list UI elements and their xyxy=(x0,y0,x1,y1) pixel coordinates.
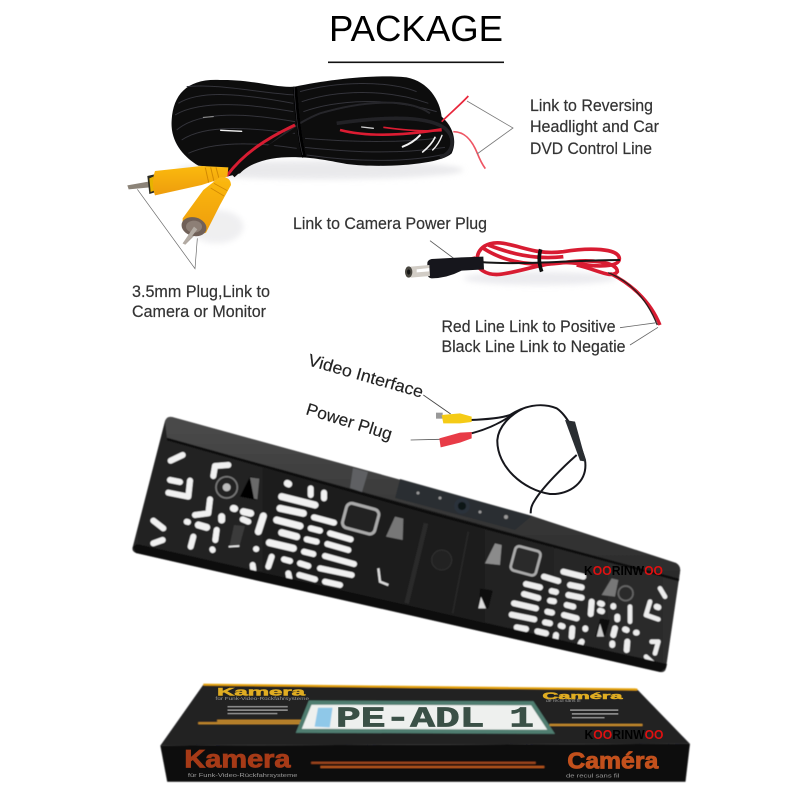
product box: für Funk-Video-Rückfahrsysteme xyxy=(188,773,297,779)
wire highlights xyxy=(203,117,442,152)
photo: camera connector wires xyxy=(411,395,586,513)
product box: für Funk-Video-Rückfahrsysteme xyxy=(215,696,310,702)
box top face xyxy=(160,685,690,746)
callout: red and black lines: Black Line Link to Negatie xyxy=(442,337,626,356)
red wires xyxy=(227,125,295,176)
product box xyxy=(160,685,690,782)
cable bundle xyxy=(172,76,454,177)
callout: reversing headlight: Link to Reversing xyxy=(530,96,653,115)
box front face xyxy=(160,744,690,782)
watermark: frame: KOORINWOO xyxy=(584,564,663,578)
box labels: Caméra xyxy=(567,748,659,774)
callout: 3.5mm plug: Camera or Monitor xyxy=(132,302,266,321)
plate number: PE-ADL 1 xyxy=(336,704,534,736)
left mounting slots xyxy=(153,455,354,585)
photo: AV extension cable coil xyxy=(127,76,485,269)
product box: de recul sans fil xyxy=(566,773,619,779)
photo: power cable xyxy=(405,241,660,345)
right mounting slots xyxy=(512,572,665,663)
callout: 3.5mm plug xyxy=(132,282,270,321)
box labels: Caméra xyxy=(543,691,624,702)
icon: yellow RCA connector xyxy=(436,413,443,419)
band xyxy=(295,87,304,157)
watermark: box: KOORINWOO xyxy=(584,728,664,742)
callout: red and black lines xyxy=(442,317,626,356)
box labels xyxy=(184,687,659,774)
camera housing xyxy=(395,479,532,530)
leader lines xyxy=(137,189,197,269)
icon: DC barrel plug xyxy=(427,257,484,278)
box labels: Kamera xyxy=(217,687,307,699)
left reflective details xyxy=(216,477,403,585)
callout: 3.5mm plug: 3.5mm Plug,Link to xyxy=(132,282,270,301)
frame top band xyxy=(165,417,680,579)
callout: camera power plug: Link to Camera Power Plug xyxy=(293,214,487,233)
photo: licence plate camera frame xyxy=(132,417,680,672)
callout: red and black lines: Red Line Link to Positive xyxy=(442,317,616,336)
callout: reversing headlight xyxy=(467,96,659,158)
label: video interface: Video Interface xyxy=(306,351,426,402)
icon: red RCA connector xyxy=(439,432,472,447)
frame body xyxy=(132,417,680,672)
title: PACKAGE xyxy=(329,8,503,49)
licence plate xyxy=(299,703,551,732)
callout: reversing headlight: Headlight and Car xyxy=(530,117,659,136)
right reflective details xyxy=(407,523,633,637)
box labels: Kamera xyxy=(184,746,291,773)
icon: yellow RCA plugs xyxy=(127,166,231,245)
label: power plug: Power Plug xyxy=(304,400,394,444)
product box: de recul sans fil xyxy=(546,698,580,704)
callout: reversing headlight: DVD Control Line xyxy=(530,139,652,158)
